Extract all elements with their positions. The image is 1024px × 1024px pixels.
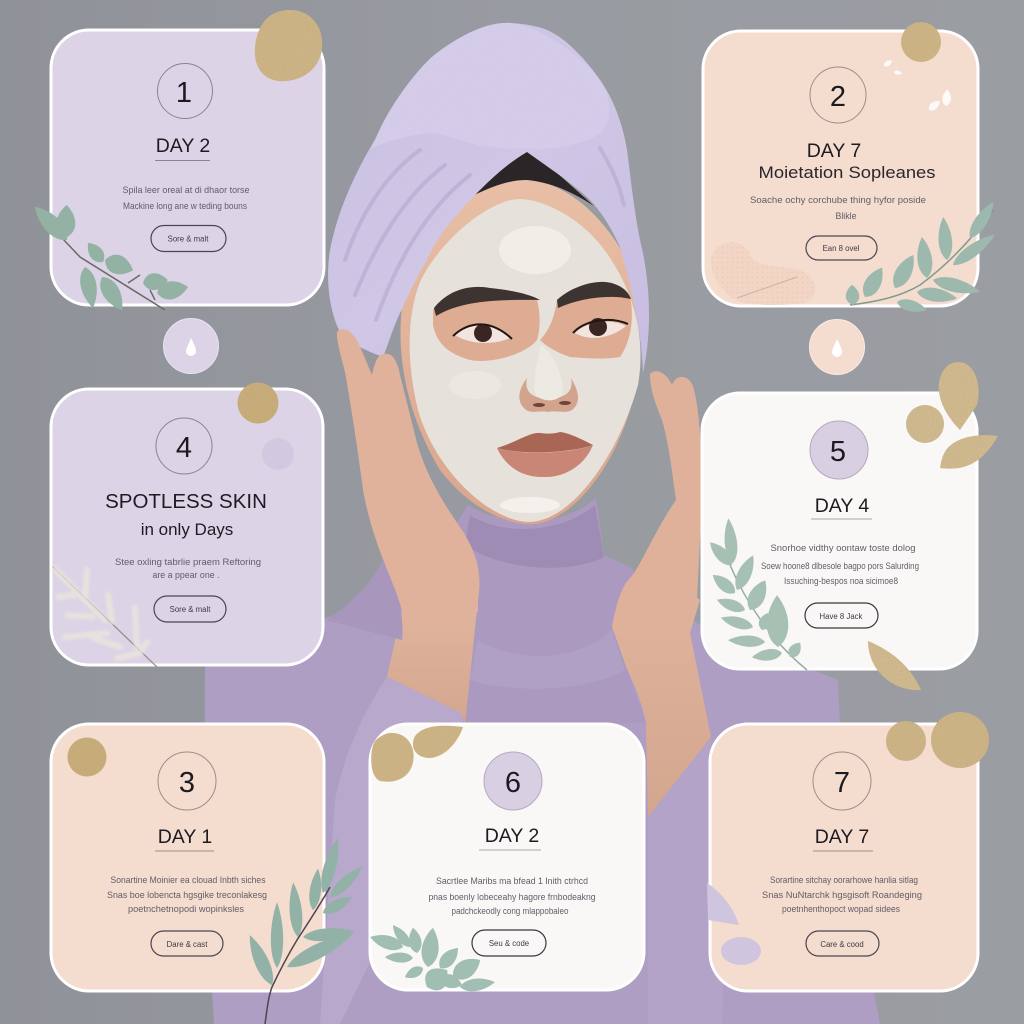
lilac shapes: card 7 xyxy=(707,883,761,965)
card 5 xyxy=(702,393,977,669)
hair xyxy=(472,146,594,206)
eye patch left xyxy=(433,293,540,361)
step number 1 xyxy=(158,64,212,118)
step number 6: 6 xyxy=(505,767,521,799)
nose xyxy=(519,345,578,412)
body text: Sonartine Moinier ea clouad Inbth siches xyxy=(110,875,266,885)
subheading: in only Days xyxy=(141,520,233,539)
card 1 xyxy=(51,30,324,305)
eye patch right xyxy=(540,288,632,359)
step number 7: 7 xyxy=(834,767,850,799)
button xyxy=(472,930,546,956)
towel turban xyxy=(328,23,649,373)
body text xyxy=(428,876,596,916)
body text xyxy=(122,185,250,211)
body text: Sorartine sitchay oorarhowe hanlia sitlag xyxy=(770,875,918,885)
tan blob: card 3 xyxy=(68,738,106,776)
step number 5: 5 xyxy=(830,436,846,468)
branch: card 2 xyxy=(845,198,999,315)
right forearm xyxy=(612,560,711,817)
subheading: Moietation Sopleanes xyxy=(758,164,936,182)
clay mask xyxy=(410,199,641,522)
button: Care & cood xyxy=(820,940,864,949)
heading: DAY 7 xyxy=(807,140,861,162)
body text: poetnchetnopodi wopinksles xyxy=(128,904,245,914)
button xyxy=(806,931,879,956)
card 3 xyxy=(51,724,324,991)
step number 7 xyxy=(813,752,871,810)
branch: card 6 xyxy=(368,922,496,996)
face skin xyxy=(401,178,639,524)
body text: Stee oxling tabrlie praem Reftoring xyxy=(115,557,261,567)
body text: Issuching-bespos noa sicimoe8 xyxy=(784,576,898,586)
button: Dare & cast xyxy=(167,940,208,949)
heading: DAY 4 xyxy=(815,495,869,517)
step number 3 xyxy=(158,752,216,810)
scarf xyxy=(326,498,646,725)
body text: Snas NuNtarchk hgsgisoft Roandeging xyxy=(762,890,922,900)
right hand xyxy=(612,371,702,633)
button: Sore & malt xyxy=(170,605,211,614)
heading: SPOTLESS SKIN xyxy=(105,490,267,513)
left sleeve xyxy=(320,677,470,1024)
button: Have 8 Jack xyxy=(820,612,863,621)
body text: Spila leer oreal at di dhaor torse xyxy=(122,185,250,195)
button: Seu & code xyxy=(489,939,529,948)
right sleeve xyxy=(648,737,723,1024)
card 2 small white leaves xyxy=(883,58,952,113)
card 4 xyxy=(51,389,323,665)
body text: Blikle xyxy=(835,211,857,221)
right eyebrow xyxy=(557,282,631,308)
body text: Soache ochy corchube thing hyfor poside xyxy=(750,195,926,205)
heading: DAY 7 xyxy=(815,826,869,848)
body text xyxy=(762,875,922,914)
button xyxy=(806,236,877,260)
dotted patch xyxy=(711,242,815,305)
button xyxy=(154,596,226,622)
body text: Snorhoe vidthy oontaw toste dolog xyxy=(770,543,916,553)
drop badge right xyxy=(810,320,864,374)
body text xyxy=(107,875,267,914)
body text: Snas boe lobencta hgsgike treconlakesg xyxy=(107,890,267,900)
step number 2: 2 xyxy=(830,81,846,113)
tan blob: card 1 xyxy=(255,10,322,81)
step number 3: 3 xyxy=(179,767,195,799)
body text xyxy=(750,195,926,221)
button: Sore & malt xyxy=(168,234,209,244)
step number 6 xyxy=(484,752,542,810)
body text: poetnhenthopoct wopad sidees xyxy=(782,904,901,914)
step number 5 xyxy=(810,421,868,479)
left forearm xyxy=(387,595,478,725)
card 7 xyxy=(710,724,978,991)
tan blob: card 4 xyxy=(238,382,278,424)
heading: DAY 2 xyxy=(156,135,210,157)
tan blobs: card 7 xyxy=(886,712,989,768)
tan blob: card 2 xyxy=(901,22,941,62)
card 2 xyxy=(703,31,978,306)
left eyebrow xyxy=(434,287,540,316)
left eye xyxy=(453,324,512,343)
tan shapes: card 6 xyxy=(371,726,463,782)
branch: card 1 xyxy=(29,201,190,315)
button xyxy=(151,226,226,252)
card 6 xyxy=(370,724,644,990)
mask highlights xyxy=(499,226,571,274)
right eye xyxy=(573,318,628,338)
body text: pnas boenly lobeceahy hagore frnbodeakng xyxy=(428,892,596,902)
branch: card 5 xyxy=(706,518,807,670)
body text: Sacrtlee Maribs ma bfead 1 Inith ctrhcd xyxy=(436,876,588,886)
wheat sprig: card 4 xyxy=(53,567,157,667)
button xyxy=(151,931,223,956)
step number 2 xyxy=(810,67,866,123)
body text xyxy=(115,557,261,580)
body text xyxy=(761,543,919,586)
robe xyxy=(205,590,880,1024)
tan shapes: card 5 xyxy=(868,362,998,690)
body text: padchckeodly cong mlappobaleo xyxy=(452,906,569,916)
step number 4: 4 xyxy=(176,432,192,464)
button: Ean 8 ovel xyxy=(823,244,860,253)
body text: Soew hoone8 dlbesole bagpo pors Salurding xyxy=(761,561,919,571)
step number 4 xyxy=(156,418,212,474)
heading: DAY 2 xyxy=(485,825,539,847)
drop badge left xyxy=(164,318,218,374)
pale lilac shapes xyxy=(262,438,294,470)
model figure xyxy=(205,23,880,1024)
body text: Mackine long ane w teding bouns xyxy=(123,201,248,211)
branch: card 3 xyxy=(243,836,366,1024)
left hand xyxy=(337,329,479,620)
lips xyxy=(497,432,593,477)
heading: DAY 1 xyxy=(158,826,212,848)
button xyxy=(805,603,878,628)
step number 1: 1 xyxy=(176,77,192,109)
body text: are a ppear one . xyxy=(152,570,220,580)
